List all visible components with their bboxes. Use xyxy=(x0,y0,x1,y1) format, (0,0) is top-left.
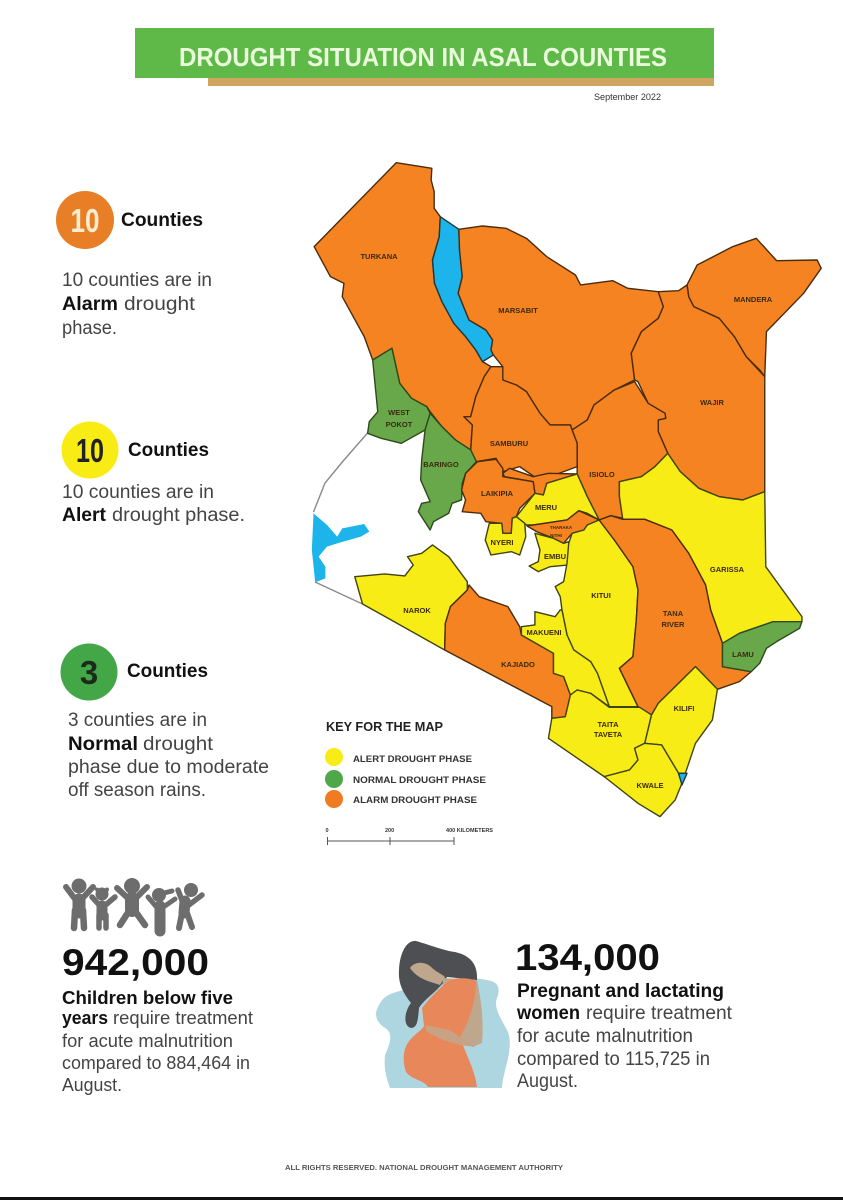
lake: Victoria xyxy=(312,513,369,582)
text: children description: require treatment xyxy=(113,1008,253,1028)
badge: 10 alert xyxy=(62,422,118,478)
county labels: KAJIADO xyxy=(501,660,535,669)
text: children description: compared to 884,464 in xyxy=(62,1053,250,1073)
legend item: alarm xyxy=(325,790,477,808)
text: alert description: 10 counties are in xyxy=(62,482,214,503)
county: Embu xyxy=(529,533,569,572)
text: women description xyxy=(516,981,733,1092)
text: normal description: phase due to moderate xyxy=(68,757,269,778)
footer: ALL RIGHTS RESERVED. NATIONAL DROUGHT MANAGEMENT AUTHORITY xyxy=(285,1165,563,1172)
county labels: KILIFI xyxy=(674,704,694,713)
county: Kitui xyxy=(555,520,638,707)
text: women description: compared to 115,725 in xyxy=(517,1049,710,1070)
county labels: NITHI xyxy=(550,533,562,538)
text: children description: August. xyxy=(62,1075,122,1095)
lake: Turkana xyxy=(432,217,493,362)
text: women description: Pregnant and lactating xyxy=(517,981,724,1002)
county labels: KITUI xyxy=(591,591,611,600)
county labels: MAKUENI xyxy=(526,628,562,637)
text: alert description: Alert xyxy=(62,505,107,526)
county labels: GARISSA xyxy=(710,565,745,574)
text: children description: years xyxy=(62,1007,108,1028)
legend item: alarm: ALARM DROUGHT PHASE xyxy=(353,795,477,805)
county: Narok xyxy=(355,545,467,650)
stat: women xyxy=(515,937,733,1092)
text: normal description: Normal xyxy=(68,734,138,755)
text: normal description: 3 counties are in xyxy=(68,710,207,731)
county labels: TURKANA xyxy=(360,252,398,261)
text: alarm description: 10 counties are in xyxy=(62,270,212,291)
county: Isiolo xyxy=(572,382,668,520)
county: Baringo xyxy=(418,413,476,530)
county: Samburu xyxy=(464,367,577,478)
legend: key for the map xyxy=(325,719,486,808)
county labels: LAMU xyxy=(732,650,754,659)
county: Nyeri xyxy=(485,517,526,555)
badge: 3 normal: 3 xyxy=(80,654,98,691)
text: alarm description: drought xyxy=(124,294,196,315)
county: Lamu xyxy=(722,622,802,672)
county labels: TANA xyxy=(663,609,684,618)
county: Taita Taveta xyxy=(548,690,652,777)
text: women description: for acute malnutrition xyxy=(517,1026,693,1047)
county labels: RIVER xyxy=(662,620,685,629)
county labels: POKOT xyxy=(386,420,413,429)
text: alarm description: Alarm xyxy=(62,294,118,315)
map of Kenya counties xyxy=(312,163,821,817)
county: Kwale xyxy=(604,743,682,817)
county: Turkana xyxy=(314,163,491,450)
county: Marsabit xyxy=(458,226,663,430)
legend item: normal xyxy=(325,770,486,788)
text: children description xyxy=(62,987,253,1095)
title banner xyxy=(135,28,714,86)
county labels: NYERI xyxy=(491,538,513,547)
scale bar: 0 xyxy=(326,828,329,834)
text: normal description: off season rains. xyxy=(68,780,206,801)
county labels: MARSABIT xyxy=(498,306,538,315)
county: West Pokot xyxy=(368,348,430,443)
county labels: MANDERA xyxy=(734,295,773,304)
panel: alert counties xyxy=(62,422,245,526)
panel: normal counties xyxy=(60,644,269,801)
text: alert description xyxy=(62,482,245,526)
county: Garissa xyxy=(619,453,802,643)
legend item: normal: NORMAL DROUGHT PHASE xyxy=(353,775,486,785)
county labels xyxy=(360,252,773,790)
county labels: MERU xyxy=(535,503,557,512)
county labels: SAMBURU xyxy=(490,439,528,448)
date: September 2022 xyxy=(594,92,661,102)
text: women description: women xyxy=(516,1003,580,1024)
county labels: WEST xyxy=(388,408,410,417)
county labels: TAVETA xyxy=(594,730,623,739)
text: alert description: drought phase. xyxy=(112,505,245,526)
text: normal description: drought xyxy=(143,734,214,755)
heading: counties: Counties xyxy=(121,209,203,231)
county labels: BARINGO xyxy=(423,460,459,469)
county labels: THARAKA xyxy=(550,525,573,530)
legend item: alert: ALERT DROUGHT PHASE xyxy=(353,754,472,764)
title banner: DROUGHT SITUATION IN ASAL COUNTIES xyxy=(179,42,667,72)
county labels: WAJIR xyxy=(700,398,724,407)
text: women description: August. xyxy=(517,1071,578,1092)
scale bar: 200 xyxy=(385,828,394,834)
text: normal description xyxy=(68,710,269,801)
northern counties xyxy=(314,163,821,530)
county labels: KWALE xyxy=(636,781,664,790)
area: Samburu-Isiolo strip xyxy=(503,468,577,495)
badge: 10 alert: 10 xyxy=(76,432,104,469)
county labels: ISIOLO xyxy=(589,470,615,479)
county: Kajiado xyxy=(445,585,570,718)
county: Kilifi xyxy=(645,667,717,773)
icon: pregnant woman xyxy=(376,941,510,1088)
text: children description: for acute malnutrition xyxy=(62,1031,233,1051)
county: Makueni xyxy=(521,610,609,707)
scale bar: 400 KILOMETERS xyxy=(446,828,493,834)
county: Tana River xyxy=(599,516,751,715)
county: Mandera xyxy=(687,238,821,377)
county labels: EMBU xyxy=(544,552,566,561)
county: Meru xyxy=(516,474,599,525)
water: Mombasa xyxy=(679,773,687,785)
stat: women: 134,000 xyxy=(515,937,660,978)
county labels: LAIKIPIA xyxy=(481,489,514,498)
text: children description: Children below five xyxy=(62,987,233,1008)
county: Laikipia xyxy=(462,459,535,533)
stat: children: 942,000 xyxy=(62,942,209,983)
badge: 10 alarm xyxy=(56,191,114,249)
southern counties xyxy=(312,453,802,817)
legend: key for the map: KEY FOR THE MAP xyxy=(326,719,443,734)
western border line xyxy=(314,433,368,512)
text: alarm description xyxy=(62,270,212,339)
icon: children xyxy=(66,878,202,931)
text: alarm description: phase. xyxy=(62,318,117,339)
heading: counties: Counties xyxy=(127,660,208,682)
county: Wajir xyxy=(631,285,765,500)
text: women description: require treatment xyxy=(586,1003,733,1024)
badge: 3 normal xyxy=(60,644,118,700)
scale bar xyxy=(326,828,493,845)
panel: alarm counties xyxy=(56,191,212,339)
badge: 10 alarm: 10 xyxy=(70,202,100,239)
county labels: NAROK xyxy=(403,606,431,615)
county: Tharaka Nithi xyxy=(527,511,599,543)
stat: children xyxy=(62,942,253,1095)
heading: counties: Counties xyxy=(128,439,209,461)
legend item: alert xyxy=(325,748,472,766)
county labels: TAITA xyxy=(598,720,619,729)
